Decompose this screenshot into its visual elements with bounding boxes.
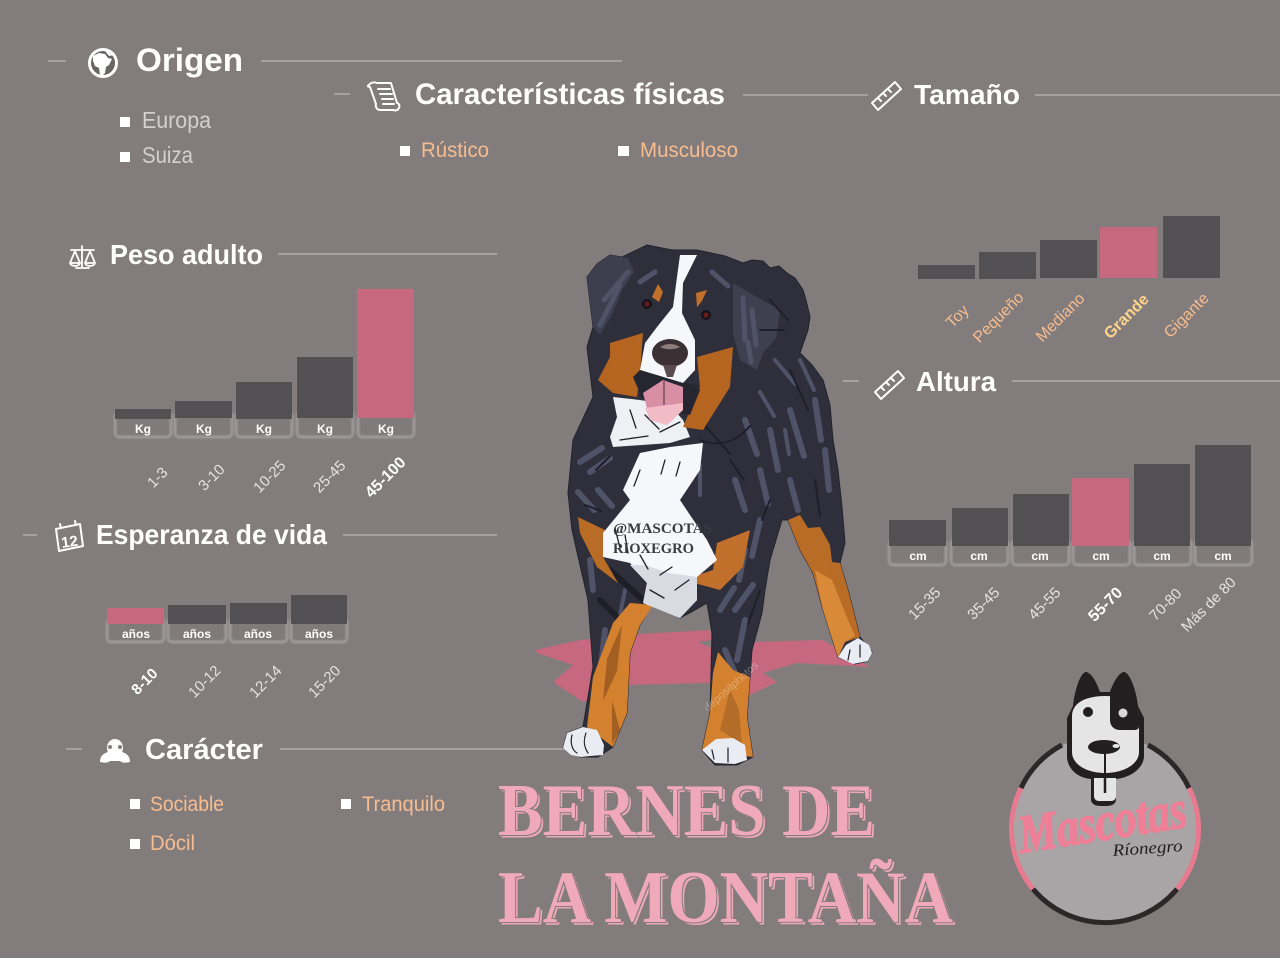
list: origen: Europa xyxy=(142,107,211,133)
icon: ruler xyxy=(875,371,904,399)
bar chart: esperanza de vida: 10-12 xyxy=(185,662,224,701)
bar chart: altura: 45-55 xyxy=(1025,584,1064,623)
bar chart: altura: cm xyxy=(970,549,988,563)
bar chart: peso adulto: Kg xyxy=(135,422,151,436)
logo circle xyxy=(1011,735,1199,923)
heading: peso adulto: Peso adulto xyxy=(110,239,263,270)
heading: altura: Altura xyxy=(916,366,996,397)
bar chart: peso adulto xyxy=(115,289,414,501)
dog body silhouette xyxy=(563,245,872,765)
bar chart: esperanza de vida xyxy=(107,595,347,701)
bar chart: altura: cm xyxy=(909,549,927,563)
heading: origen: Origen xyxy=(136,42,243,78)
list: carácter: Tranquilo xyxy=(362,793,445,816)
chest orange right xyxy=(683,530,750,590)
title xyxy=(498,770,953,939)
right cheek tan xyxy=(683,347,733,430)
bar chart: altura: cm xyxy=(1092,549,1110,563)
bar chart: esperanza de vida: 12-14 xyxy=(246,662,285,701)
panel: peso adulto xyxy=(70,239,497,501)
fur highlights xyxy=(578,272,829,678)
logo dog head xyxy=(1067,672,1144,806)
heading: esperanza de vida: Esperanza de vida xyxy=(96,519,327,550)
logo wordmark: Mascotas xyxy=(1013,779,1191,865)
bar chart: peso adulto: 10-25 xyxy=(250,457,289,496)
icon: scroll xyxy=(368,82,399,110)
panel: tamaño xyxy=(872,79,1280,346)
heading: tamaño: Tamaño xyxy=(914,79,1020,110)
rear leg orange xyxy=(788,515,860,657)
list: características: Musculoso xyxy=(640,139,738,162)
chest fur strokes xyxy=(615,460,689,598)
brows xyxy=(652,284,707,307)
icon: ruler xyxy=(872,82,901,110)
list: carácter: Dócil xyxy=(150,832,195,855)
left ear xyxy=(587,255,634,335)
bar chart: altura: 55-70 xyxy=(1085,584,1126,625)
eyes xyxy=(642,299,711,320)
bar chart: altura: 35-45 xyxy=(964,584,1003,623)
bar chart: tamaño: Toy xyxy=(943,302,973,332)
bar chart: altura: Más de 80 xyxy=(1178,574,1240,636)
chest orange left xyxy=(578,517,618,583)
panel: características físicas xyxy=(334,78,868,162)
panel: carácter xyxy=(66,734,565,855)
logo: mascotas rionegro xyxy=(1011,672,1199,923)
bar chart: esperanza de vida: años xyxy=(183,627,211,641)
bar chart: altura: cm xyxy=(1153,549,1171,563)
bar chart: peso adulto: Kg xyxy=(196,422,212,436)
heading: carácter: Carácter xyxy=(145,734,263,766)
dog caption: @MASCOTAS xyxy=(613,521,712,537)
bar chart: peso adulto: Kg xyxy=(317,422,333,436)
list: origen: Suiza xyxy=(142,142,193,168)
illustration: bernese mountain dog xyxy=(563,245,872,765)
bar chart: esperanza de vida: años xyxy=(305,627,333,641)
dog caption: RIOXEGRO xyxy=(613,541,694,557)
list: características: Rústico xyxy=(421,139,489,162)
icon: people xyxy=(100,739,130,763)
panel: esperanza de vida xyxy=(23,519,497,701)
bar chart: altura: 70-80 xyxy=(1146,585,1185,624)
title: LA MONTAÑA xyxy=(498,857,953,939)
list: carácter xyxy=(130,793,445,855)
watermark: depositphotos xyxy=(702,659,761,714)
front leg orange (left) xyxy=(587,603,653,747)
dark fur strokes xyxy=(585,300,820,624)
panel: altura xyxy=(843,366,1280,636)
illustration: paint splash xyxy=(535,630,870,717)
chest shading xyxy=(630,565,697,618)
white paws xyxy=(563,638,872,764)
neck ruff xyxy=(610,397,690,447)
bar chart: peso adulto: Kg xyxy=(256,422,272,436)
icon: globe xyxy=(90,50,116,76)
list: origen xyxy=(120,107,211,168)
tongue xyxy=(643,380,683,425)
icon: calendar xyxy=(56,521,83,552)
right ear xyxy=(733,283,780,370)
front leg orange (right) xyxy=(702,652,753,757)
bar chart: tamaño: Grande xyxy=(1101,291,1153,343)
bar chart: peso adulto: Kg xyxy=(378,422,394,436)
panel: origen xyxy=(48,42,622,168)
logo subtitle: Ríonegro xyxy=(1111,836,1183,860)
title: BERNES DE xyxy=(498,770,875,852)
icon: calendar: 12 xyxy=(60,533,79,552)
icon: scales xyxy=(70,246,95,268)
bar chart: tamaño: Gigante xyxy=(1161,290,1213,342)
bar chart: tamaño: Pequeño xyxy=(970,289,1028,346)
bar chart: peso adulto: 25-45 xyxy=(310,457,349,496)
white chest xyxy=(603,443,717,618)
bar chart: peso adulto: 45-100 xyxy=(362,454,410,501)
white blaze and muzzle xyxy=(640,255,697,383)
bar chart: esperanza de vida: años xyxy=(122,627,150,641)
paw lines xyxy=(571,645,860,762)
bar chart: esperanza de vida: años xyxy=(244,627,272,641)
bar chart: altura xyxy=(889,445,1252,636)
bar chart: altura: cm xyxy=(1214,549,1232,563)
bar chart: altura: 15-35 xyxy=(905,584,944,623)
list: carácter: Sociable xyxy=(150,793,224,816)
bar chart: tamaño xyxy=(918,216,1220,346)
dog caption xyxy=(613,521,712,557)
bar chart: esperanza de vida: 15-20 xyxy=(305,662,344,701)
list: características xyxy=(400,139,738,162)
left cheek tan xyxy=(598,333,643,397)
heading: características físicas: Características físicas xyxy=(415,78,725,111)
mouth xyxy=(633,370,700,415)
bar chart: tamaño: Mediano xyxy=(1033,290,1089,346)
nose xyxy=(652,339,688,367)
bar chart: peso adulto: 1-3 xyxy=(144,464,171,491)
bar chart: esperanza de vida: 8-10 xyxy=(128,665,161,698)
bar chart: peso adulto: 3-10 xyxy=(195,461,228,494)
bar chart: altura: cm xyxy=(1031,549,1049,563)
